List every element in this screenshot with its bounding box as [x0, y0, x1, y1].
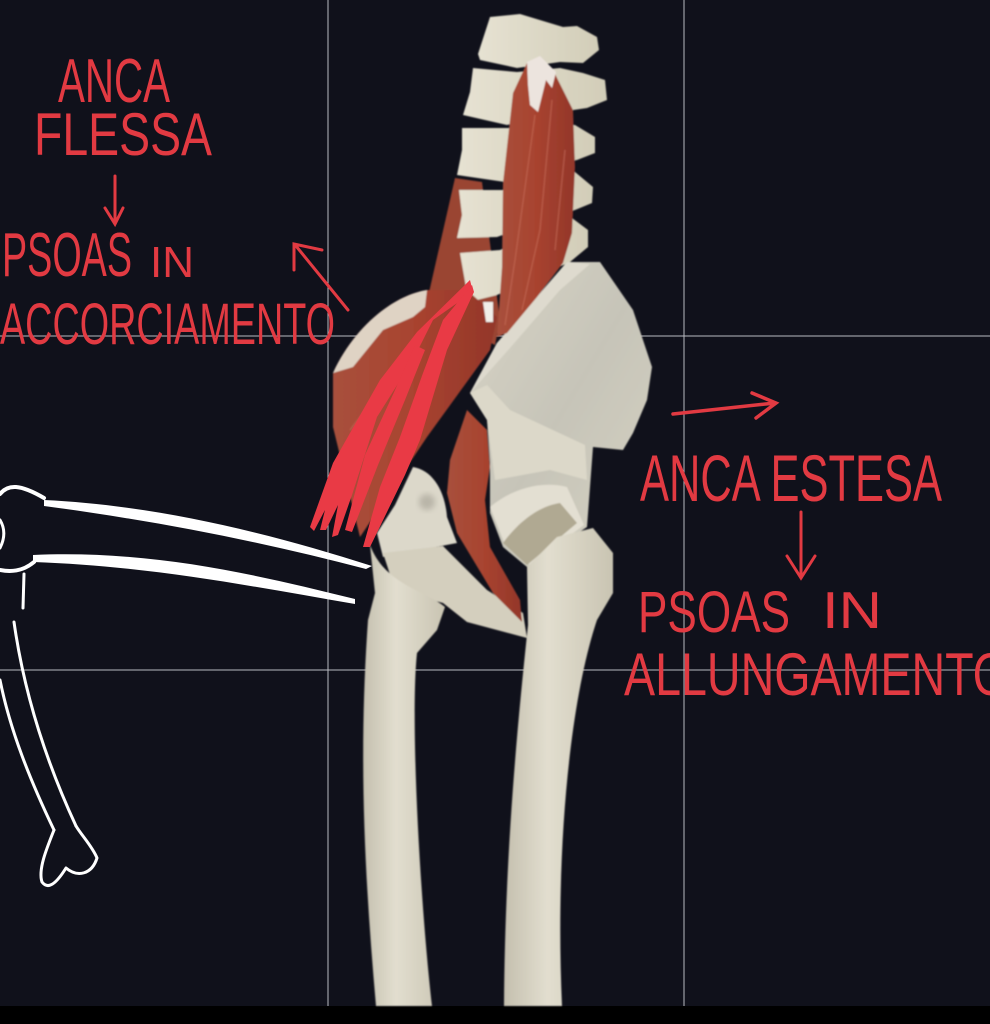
annotation: anca flessa: PSOAS — [2, 221, 132, 290]
annotation: anca flessa: ANCA — [58, 47, 170, 116]
body and lower leg outline — [0, 487, 97, 886]
front psoas muscle — [497, 63, 575, 337]
acetabulum rim — [490, 485, 584, 565]
white gap at the spine base — [483, 302, 493, 322]
highlighted red shortened muscle fibres — [310, 280, 474, 547]
arrow: down flessa — [105, 176, 123, 224]
arrow: down estesa — [787, 512, 815, 578]
annotation: anca estesa — [624, 441, 990, 708]
flexed leg sketch — [0, 487, 372, 886]
hip ridge above the socket — [470, 385, 587, 480]
lower iliopsoas muscle — [447, 410, 522, 622]
right hip bone — [470, 262, 652, 567]
annotation: anca estesa: PSOAS — [638, 580, 790, 645]
femoral head dimple — [419, 494, 435, 510]
anatomy: skeleton and muscles — [333, 14, 652, 1006]
annotation: anca flessa: ACCORCIAMENTO — [0, 292, 335, 357]
left femur — [363, 545, 445, 1006]
deep psoas behind spine — [425, 178, 500, 345]
arrow: right — [673, 393, 776, 418]
thigh lines — [44, 500, 372, 569]
arrow: up-left — [294, 244, 348, 310]
cut surface of the socket — [503, 503, 577, 565]
annotation: anca flessa — [0, 47, 335, 357]
pubic ramus — [383, 546, 527, 638]
muscle fibres — [350, 100, 565, 430]
iliac crest tendon — [333, 290, 427, 373]
iliacus muscle — [333, 290, 497, 537]
annotation: anca flessa: FLESSA — [34, 101, 212, 168]
foot — [41, 826, 97, 886]
psoas tendon at top — [527, 56, 556, 112]
hip crest highlight — [470, 262, 590, 393]
right femur — [504, 528, 613, 1006]
lumbar vertebrae — [457, 14, 607, 300]
annotation: anca flessa: IN — [150, 238, 194, 287]
annotation: anca estesa: IN — [822, 582, 882, 640]
femoral head — [377, 467, 457, 557]
